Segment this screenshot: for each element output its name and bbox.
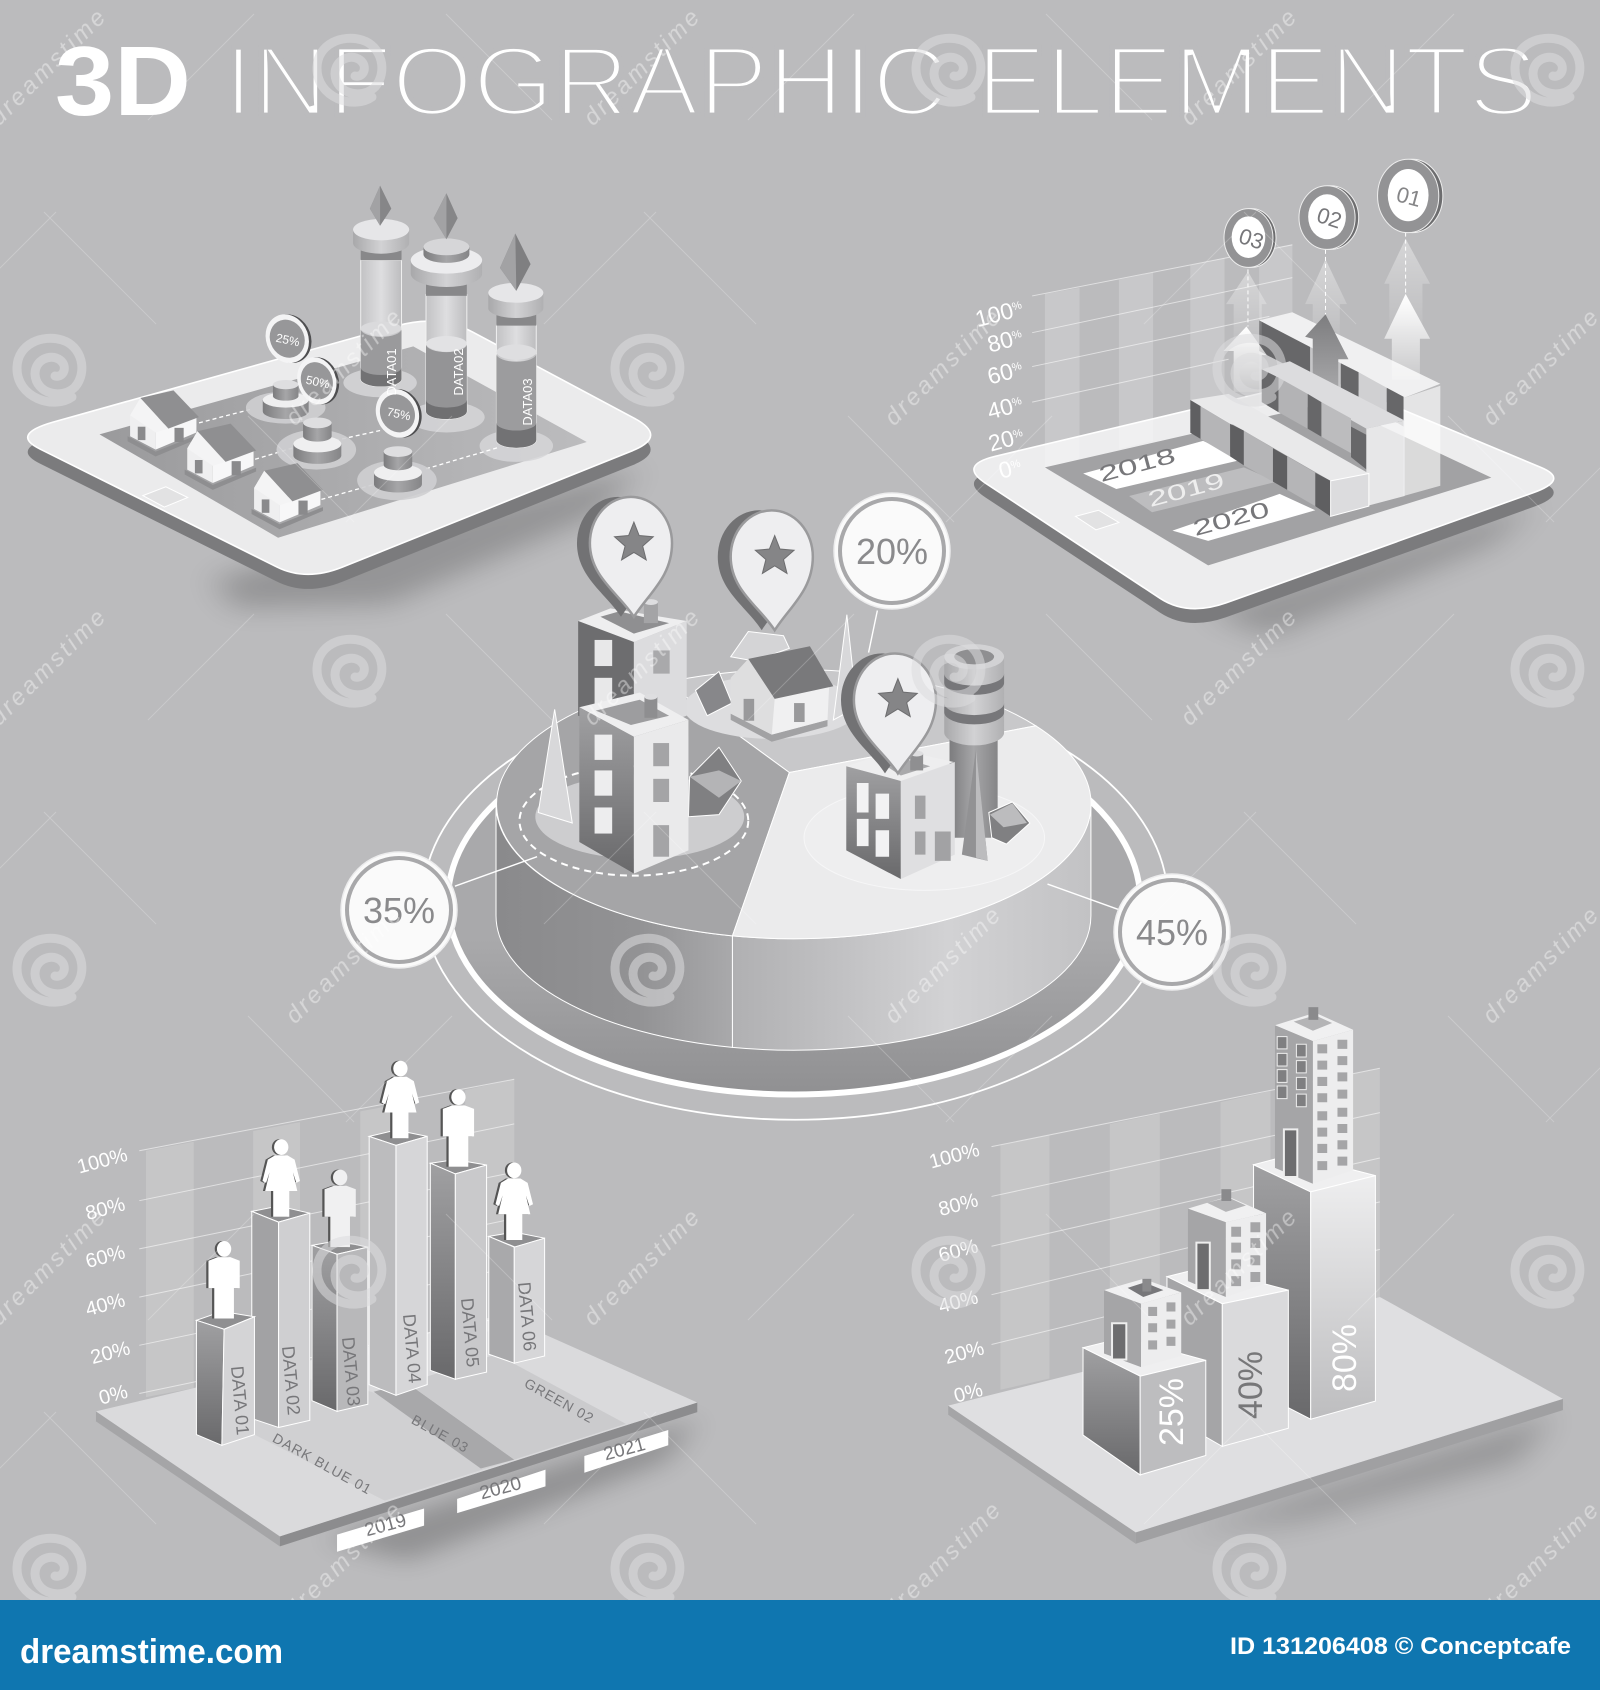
banner and coin labels: 01: [1394, 182, 1424, 212]
year tags: [337, 1430, 668, 1552]
watermark overlay: dreamstime: [879, 1495, 1008, 1624]
axis labels: 20%: [88, 1337, 133, 1369]
callout leader lines: [455, 610, 1118, 909]
number coins: [1224, 159, 1443, 267]
axis labels: %: [1011, 427, 1024, 441]
pie top sectors: [497, 669, 1091, 939]
band and year labels: [270, 1375, 648, 1541]
axis labels: 40%: [936, 1286, 981, 1318]
bar labels: DATA 05: [457, 1297, 483, 1368]
middle building: [1188, 1189, 1266, 1297]
callout 20%: 20%: [856, 531, 928, 572]
axis labels: %: [1010, 395, 1023, 409]
short bar: [1083, 1338, 1206, 1475]
coin and tower labels: DATA02: [451, 348, 466, 396]
chart base: [96, 1315, 697, 1561]
watermark overlay: dreamstime: [879, 900, 1008, 1029]
spikes and gems: [538, 615, 857, 823]
chart backdrop: [139, 1079, 514, 1397]
panel: buildings bar chart: [927, 1007, 1563, 1544]
home button: [143, 487, 188, 507]
row 3 of steps: [1259, 312, 1440, 496]
watermark overlay: dreamstime: [1175, 1202, 1304, 1331]
axis labels: 60%: [936, 1235, 981, 1267]
people figures: [206, 1061, 533, 1319]
bars: [196, 1130, 545, 1445]
callout 45%: [1114, 874, 1230, 990]
bar percentages: [1153, 1324, 1364, 1446]
axis labels: 60: [984, 358, 1016, 389]
callout 45%: 45%: [1136, 912, 1208, 953]
band and year labels: 2020: [477, 1473, 524, 1504]
panel: people bar chart: [75, 1061, 697, 1561]
banner and coin labels: 03: [1236, 223, 1267, 255]
watermark overlay: dreamstime: [1175, 602, 1304, 731]
axis labels: 0: [996, 455, 1015, 484]
axis labels: 40%: [83, 1289, 128, 1321]
axis labels: [927, 1139, 987, 1408]
axis labels: 100%: [75, 1144, 130, 1178]
row 1 of steps: [1190, 394, 1369, 516]
disc stacks: [246, 380, 437, 500]
chart backdrop: [1032, 244, 1292, 469]
axis labels: 40: [984, 393, 1016, 424]
axis labels: %: [1009, 458, 1022, 472]
axis labels: 20: [985, 425, 1017, 456]
footer bar: ID 131206408 © Conceptcafe: [1230, 1633, 1571, 1660]
watermark overlay: dreamstime: [578, 1202, 707, 1331]
back tower: [578, 599, 687, 733]
tablet screen: [1045, 402, 1491, 565]
middle bar: [1167, 1268, 1288, 1446]
axis labels: 100: [972, 297, 1016, 332]
axis labels: 80%: [83, 1193, 128, 1225]
bar labels: DATA 01: [227, 1365, 253, 1436]
watermark overlay: dreamstime: [879, 302, 1008, 431]
bar percentages: 80%: [1326, 1324, 1364, 1392]
tablet body: [28, 321, 651, 608]
watermark overlay: dreamstime: [1175, 2, 1304, 131]
bar percentages: 25%: [1153, 1378, 1191, 1446]
panel: tablet with stepped chart: [972, 159, 1554, 637]
banner and coin labels: 02: [1314, 202, 1345, 234]
axis labels: [972, 294, 1027, 484]
coin and tower labels: 75%: [386, 405, 412, 423]
axis labels: %: [1010, 328, 1023, 342]
houses: [128, 390, 323, 529]
axis labels: 60%: [83, 1241, 128, 1273]
panel: 3D pie chart: [341, 493, 1230, 1120]
axis labels: 80%: [936, 1189, 981, 1221]
band and year labels: BLUE 03: [409, 1411, 472, 1456]
title: INFOGRAPHIC ELEMENTS: [224, 26, 1538, 136]
axis labels: %: [1010, 360, 1023, 374]
axis labels: 20%: [942, 1337, 987, 1369]
watermark overlay: dreamstime: [280, 1495, 409, 1624]
footer bar: [0, 1600, 1600, 1690]
gem right: [989, 802, 1030, 844]
banner and coin labels: 2020: [1190, 497, 1272, 541]
front tower: [579, 693, 688, 874]
axis labels: 0%: [952, 1379, 985, 1408]
map pins: [577, 497, 936, 773]
arrows: [1223, 233, 1430, 392]
panel: tablet with cylinder chart: [28, 186, 651, 608]
band and year labels: 2019: [362, 1510, 409, 1541]
tablet body: [974, 383, 1554, 637]
watermark overlay: dreamstime: [280, 900, 409, 1029]
factory chimney: [944, 644, 1004, 861]
house on pie: [731, 646, 833, 742]
data towers: [343, 186, 553, 462]
coin and tower labels: DATA03: [520, 378, 535, 426]
band and year labels: DARK BLUE 01: [270, 1430, 375, 1497]
watermark overlay: dreamstime: [280, 302, 409, 431]
pie halos: [519, 676, 1045, 890]
tall tower bar: [1254, 1154, 1375, 1419]
small building: [846, 749, 955, 879]
watermark overlay: dreamstime: [578, 602, 707, 731]
bar labels: [227, 1281, 540, 1436]
callout 35%: 35%: [363, 890, 435, 931]
bar percentages: 40%: [1232, 1351, 1270, 1419]
axis labels: 0%: [97, 1381, 130, 1410]
pie rings: [423, 682, 1168, 1120]
home button: [1076, 510, 1119, 530]
axis labels: 100%: [927, 1139, 982, 1173]
banner and coin labels: 2019: [1145, 468, 1227, 512]
callout 35%: [341, 852, 457, 968]
banner and coin labels: [1096, 182, 1424, 541]
callout 20%: [834, 493, 950, 609]
row 2 of steps: [1262, 361, 1405, 506]
chart base: [948, 1297, 1563, 1544]
banner and coin labels: 2018: [1096, 443, 1178, 487]
pie side: [496, 804, 1091, 1050]
footer bar: dreamstime.com: [20, 1633, 283, 1671]
bar labels: DATA 03: [338, 1336, 364, 1407]
bar labels: DATA 06: [514, 1281, 540, 1352]
band and year labels: GREEN 02: [522, 1375, 597, 1426]
coin and tower labels: DATA01: [384, 348, 399, 396]
bar labels: DATA 02: [278, 1345, 304, 1416]
dashed connectors: [199, 409, 497, 499]
coin and tower labels: 50%: [305, 373, 331, 391]
axis labels: %: [1011, 299, 1023, 313]
band and year labels: 2021: [601, 1434, 648, 1465]
year banners: [1083, 441, 1315, 541]
axis labels: [75, 1144, 133, 1410]
bar labels: DATA 04: [399, 1313, 425, 1384]
small building: [1104, 1279, 1181, 1367]
coin and tower labels: [275, 331, 535, 426]
axis labels: 80: [984, 326, 1016, 357]
title: 3D: [55, 26, 191, 136]
chart backdrop: [992, 1068, 1380, 1390]
tall building: [1275, 1007, 1353, 1184]
percent coins: [261, 312, 426, 440]
watermark overlay: dreamstime: [578, 2, 707, 131]
coin and tower labels: 25%: [275, 331, 301, 349]
tablet screen: [99, 346, 587, 538]
